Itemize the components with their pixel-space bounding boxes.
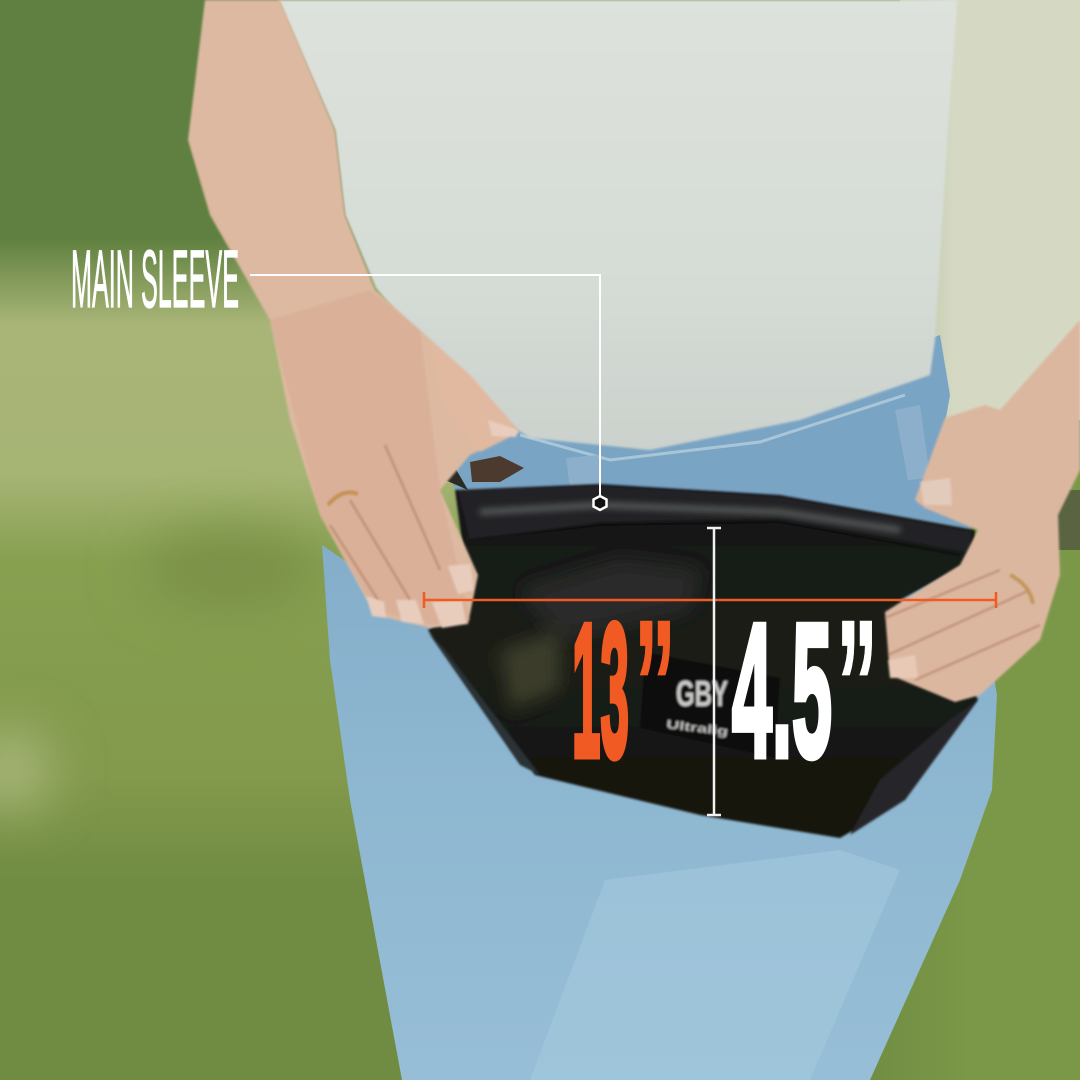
ring [328, 492, 358, 505]
brand label [640, 652, 780, 758]
leader marker [594, 496, 606, 510]
callout: main sleeve label: MAIN SLEEVE [71, 234, 239, 325]
photo: black pouch [428, 484, 978, 838]
right hand fingernails [888, 655, 918, 678]
photo: jeans [322, 335, 997, 1080]
photo: left arm and hand [188, 0, 520, 628]
infographic canvas: ” [634, 581, 676, 793]
brand label: Ultralig [666, 717, 729, 739]
infographic canvas: 13 [572, 585, 629, 797]
brand label: GBY [676, 673, 728, 714]
callout: main sleeve label [71, 234, 606, 510]
height dimension line [707, 528, 721, 815]
photo: white shirt [278, 0, 957, 450]
infographic canvas: ” [836, 581, 878, 793]
photo: right hand [885, 320, 1080, 702]
height value [732, 581, 878, 797]
width value [572, 581, 676, 797]
height value: 4.5 [732, 585, 832, 797]
width dimension line [424, 592, 996, 608]
leader line [250, 275, 600, 497]
left hand fingernails [366, 420, 518, 628]
ring [1010, 575, 1033, 604]
